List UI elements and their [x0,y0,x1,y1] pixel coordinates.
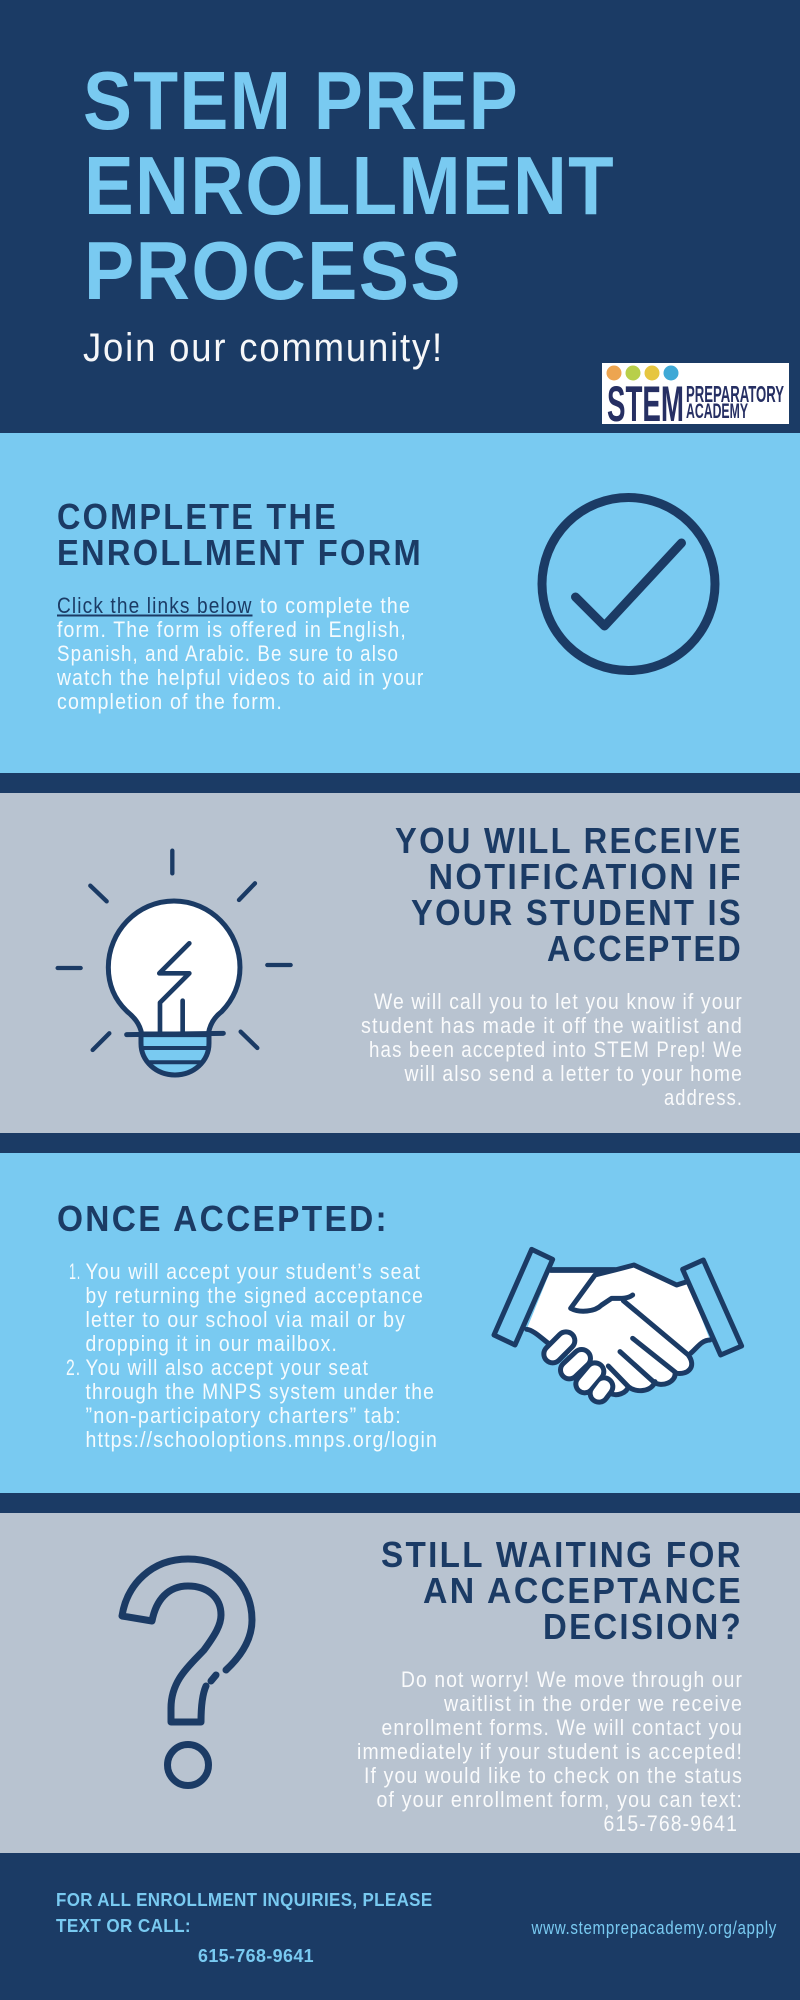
text block: form instructions: form. The form is offered in English, [57,617,407,642]
panel: acceptance notification [0,793,800,1133]
numbered list: acceptance steps: letter to our school via mail or by [86,1307,406,1332]
subtitle: Join our community! [83,326,444,370]
text block: waitlist details: Do not worry! We move through our [401,1667,743,1692]
panel: once accepted [0,1153,800,1493]
panel: complete the enrollment form [0,433,800,773]
text block: notification details: student has made it off the waitlist and [361,1013,743,1038]
divider band [0,1133,800,1153]
text block: notification details [361,989,743,1110]
numbered list: acceptance steps: You will accept your student’s seat [86,1259,421,1284]
icon: question mark [122,1559,252,1786]
divider band [0,1493,800,1513]
text block: waitlist details: enrollment forms. We will contact you [382,1715,743,1740]
numbered list: acceptance steps: ”non-participatory charters” tab: [86,1403,402,1428]
numbered list: acceptance steps: dropping it in our mailbox. [86,1331,338,1356]
text block: form instructions: Click the links below [57,593,252,618]
heading: complete the enrollment form: COMPLETE THE [57,496,338,537]
logo: STEM Preparatory Academy: ACADEMY [686,400,748,423]
text block: notification details: will also send a letter to your home [404,1061,743,1086]
text block: waitlist details: If you would like to check on the status [364,1763,743,1788]
footer contact text [56,1890,432,1966]
heading: still waiting: AN ACCEPTANCE [423,1570,743,1611]
logo: STEM Preparatory Academy: STEM [607,376,684,432]
heading: once accepted: ONCE ACCEPTED: [57,1198,389,1239]
text block: form instructions: watch the helpful videos to aid in your [56,665,424,690]
numbered list: acceptance steps [66,1259,438,1452]
text block: form instructions [56,593,424,714]
footer contact text: FOR ALL ENROLLMENT INQUIRIES, PLEASE [56,1890,432,1910]
title: ENROLLMENT [84,139,615,232]
text block: notification details: address. [664,1085,743,1110]
text block: waitlist details: waitlist in the order we receive [443,1691,743,1716]
numbered list: acceptance steps: through the MNPS system under the [86,1379,435,1404]
heading: you will receive notification [395,820,743,969]
text block: notification details: We will call you to let you know if your [374,989,743,1014]
icon: check mark in circle [542,498,715,670]
text block: waitlist details [357,1667,743,1836]
numbered list: acceptance steps: You will also accept your seat [86,1355,369,1380]
panel: footer [0,1853,800,2000]
footer contact text: TEXT OR CALL: [56,1916,191,1936]
numbered list: acceptance steps: 2. [66,1355,81,1380]
heading: still waiting [381,1534,743,1647]
heading: you will receive notification: YOUR STUDENT IS [411,892,743,933]
title [83,54,615,317]
title: PROCESS [84,224,462,317]
text block: waitlist details: 615-768-9641 [604,1811,738,1836]
title: STEM PREP [83,54,519,147]
text block: notification details: has been accepted into STEM Prep! We [369,1037,743,1062]
text block: form instructions: Spanish, and Arabic. Be sure to also [57,641,399,666]
text block: form instructions: completion of the form. [57,689,283,714]
heading: you will receive notification: ACCEPTED [547,928,743,969]
panel: still waiting [0,1513,800,1853]
icon: handshake [494,1249,742,1395]
heading: still waiting: STILL WAITING FOR [381,1534,743,1575]
heading: complete the enrollment form [57,496,423,573]
icon: light bulb [58,851,291,1075]
numbered list: acceptance steps: https://schooloptions.mnps.org/login [86,1427,438,1452]
panel: header [0,0,800,433]
numbered list: acceptance steps: 1. [69,1259,81,1284]
heading: you will receive notification: YOU WILL RECEIVE [395,820,743,861]
footer contact text: 615-768-9641 [198,1946,314,1966]
logo: STEM Preparatory Academy [602,363,789,432]
heading: complete the enrollment form: ENROLLMENT FORM [57,532,423,573]
text block: waitlist details: of your enrollment form, you can text: [376,1787,743,1812]
text block: waitlist details: immediately if your student is accepted! [357,1739,743,1764]
numbered list: acceptance steps: by returning the signed acceptance [86,1283,424,1308]
heading: you will receive notification: NOTIFICATION IF [428,856,743,897]
divider band [0,773,800,793]
text block: form instructions: to complete the [260,593,411,618]
heading: still waiting: DECISION? [543,1606,743,1647]
